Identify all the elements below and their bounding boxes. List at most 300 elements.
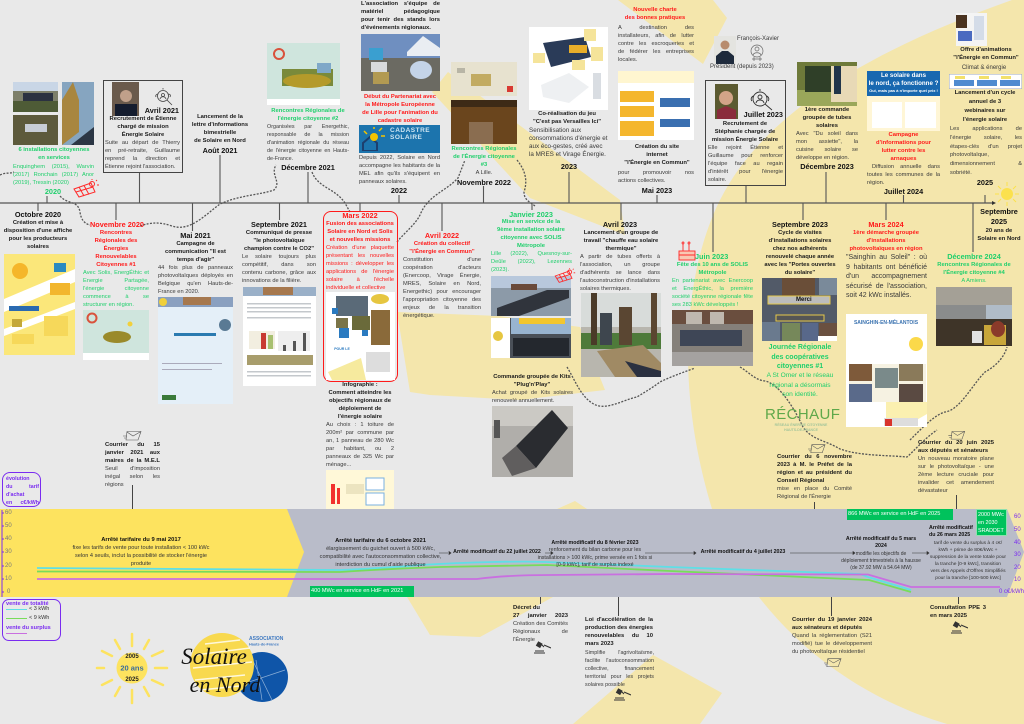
panel: courrier 6 novembre 2023 xyxy=(777,443,852,509)
heading xyxy=(672,261,753,277)
heading: Commande groupée de Kits xyxy=(493,374,571,380)
body xyxy=(974,227,1024,243)
arrêté mars 2025: vers des Appels d'Offres Simplifiés xyxy=(930,569,1006,574)
icon: gavel xyxy=(533,641,551,655)
heading xyxy=(325,381,395,421)
heading: Conseil Régional xyxy=(777,478,824,484)
body: cuisine solaire se xyxy=(796,147,858,153)
logo RECHAUF xyxy=(765,400,837,431)
body: innovations de la filière. xyxy=(242,278,301,284)
body: 20 ans de xyxy=(986,228,1012,234)
title RECHAUF: Journée Régionale xyxy=(769,344,831,351)
legend cyan: < 3 kWh xyxy=(29,606,49,612)
logo: Solaire en Nord: ASSOCIATION xyxy=(249,636,284,642)
left axis labels: 40 xyxy=(5,536,12,542)
panel: Avril 2021 recruitment xyxy=(103,80,183,173)
date: Novembre 2022 xyxy=(457,178,511,187)
heading site xyxy=(624,144,690,166)
body: d'adhérents se lance dans xyxy=(580,270,660,276)
heading webinars: Lancement d'un cycle xyxy=(955,90,1015,96)
right axis labels: 10 xyxy=(1014,577,1021,583)
body: contenu carbone, grâce aux xyxy=(242,270,316,276)
date: Avril 2022 xyxy=(425,231,459,240)
heading site: internet xyxy=(646,152,668,158)
logo RECHAUF: RÉCHAUF xyxy=(765,406,840,423)
heading xyxy=(580,229,662,253)
legend: evolution du tarif: évolution xyxy=(6,476,30,482)
body: 44 fois plus de panneaux xyxy=(158,265,233,271)
badge 866 MWc xyxy=(847,509,953,520)
body: l'association, un groupe xyxy=(580,262,660,268)
heading: Recrutement de Étienne xyxy=(110,116,176,122)
heading xyxy=(403,240,481,256)
heading: travail "chauffe eau solaire xyxy=(584,238,658,244)
heading: communication "Il est xyxy=(165,249,226,255)
body xyxy=(777,485,852,501)
body: mon assiette", la xyxy=(796,139,858,145)
arrêté 2017: produite xyxy=(131,561,151,567)
heading association: L'association s'équipe de xyxy=(361,1,440,7)
heading: Cycle de visites xyxy=(778,230,822,236)
body: Diffusion annuelle dans xyxy=(872,164,940,170)
press image xyxy=(243,287,316,386)
poster xyxy=(846,314,927,427)
body: sur le photovoltaïque - une xyxy=(918,464,994,470)
arrêté février 2023: installations > 100 kWc, prime versée en 1 fois si xyxy=(538,555,652,561)
heading association: d'événements régionaux. xyxy=(361,25,431,31)
panel: 2022 Partenariat xyxy=(359,1,440,195)
body: Avec Solis, EnergÉthic et xyxy=(83,270,149,276)
arrêté 2017 xyxy=(60,536,222,568)
photo xyxy=(714,36,736,64)
panel: offre d'animations xyxy=(948,13,1024,187)
right axis labels: 40 xyxy=(1014,540,1021,546)
logo RECHAUF: RÉSEAU ÉNERGIE CITOYENNE xyxy=(775,423,827,427)
body: "Sainghin au Soleil" : où xyxy=(846,254,927,261)
left axis labels: 30 xyxy=(5,549,12,555)
heading: "C'est pas Versailles Ici" xyxy=(533,119,601,125)
body: responsable de la mission xyxy=(267,132,349,138)
body: région. xyxy=(867,180,884,186)
heading: mars 2023 xyxy=(585,641,614,647)
heading: Lancement de la xyxy=(197,114,243,120)
photo xyxy=(715,84,738,119)
heading: production des énergies xyxy=(585,625,653,631)
date: Mai 2023 xyxy=(642,186,672,195)
body: Quand la réglementation (S21 xyxy=(792,633,872,639)
heading: Recrutement de xyxy=(723,121,767,127)
body: la MRES et Virage Énergie. xyxy=(529,151,606,158)
body: d'un accompagnement xyxy=(846,273,927,280)
logo RECHAUF: HAUTS-DE-FRANCE xyxy=(784,428,818,432)
caption: 6 installations citoyennes xyxy=(18,147,90,153)
body: commence à se xyxy=(83,294,149,300)
body: France en 2020. xyxy=(158,289,199,295)
body: développe en région. xyxy=(796,155,849,161)
title: #3 xyxy=(481,162,487,168)
heading: avec les "Portes ouvertes xyxy=(764,262,836,268)
heading: Rencontres xyxy=(100,230,132,236)
date: Décembre 2023 xyxy=(800,162,854,171)
right axis labels: 0 c€/kWh xyxy=(999,589,1024,595)
heading site: "l'Énergie en Commun" xyxy=(624,160,690,166)
logo: Solaire en Nord: Hauts-de-France xyxy=(249,642,279,646)
heading: Décret du xyxy=(513,605,540,611)
panel: Janvier 2023 xyxy=(490,210,574,359)
left axis labels: 60 xyxy=(5,510,12,516)
body: individuelle et collective xyxy=(326,285,385,291)
photo xyxy=(581,293,661,377)
left axis labels: 50 xyxy=(5,523,12,529)
heading webinars: l'énergie solaire xyxy=(963,117,1007,123)
body: l'appropriation citoyenne des xyxy=(403,297,481,303)
heading: 1ère commande xyxy=(805,107,849,113)
legend label surplus: vente du surplus xyxy=(6,625,51,631)
poster xyxy=(158,297,233,404)
red title: des bonnes pratiques xyxy=(625,15,685,21)
panel: campagne arnaques xyxy=(866,71,941,196)
heading: Énergies xyxy=(104,246,128,252)
body xyxy=(585,649,654,689)
group photo xyxy=(672,310,753,366)
body xyxy=(158,264,233,296)
body: (Enercoop, Virage Énergie, xyxy=(403,273,481,279)
name: François-Xavier xyxy=(737,36,779,42)
right axis labels: 50 xyxy=(1014,527,1021,533)
body: d'intérêt pour l'énergie xyxy=(708,169,783,175)
heading: en mars 2025 xyxy=(930,613,967,619)
timeline axis with ticks xyxy=(0,155,996,252)
body: structurer en région. xyxy=(83,302,134,308)
heading: renouvelé chaque année xyxy=(766,254,834,260)
body xyxy=(513,620,568,644)
panel: consultation PPE 3 xyxy=(930,597,987,635)
body: Un nouveau moratoire plane xyxy=(918,456,994,462)
heading: Communiqué de presse xyxy=(246,230,312,236)
body xyxy=(105,465,160,489)
body: Le solaire toujours plus xyxy=(242,254,316,260)
flyer: Oui, mais pas à n'importe quel prix ! xyxy=(869,88,938,93)
heading xyxy=(192,114,248,144)
body: dévastateur xyxy=(918,488,948,494)
body xyxy=(491,250,572,274)
body xyxy=(83,269,149,309)
arrêté mars 2025 xyxy=(926,525,1010,583)
body: énergétique. xyxy=(403,313,435,319)
panel: Septembre 2025 xyxy=(974,207,1024,244)
list of sites: (2017) Ronchain (2017) Anor xyxy=(13,172,94,178)
body: régions xyxy=(105,482,124,488)
right axis labels: 60 xyxy=(1014,514,1021,520)
logo: sun 20 ans: 2005 xyxy=(125,654,139,660)
heading xyxy=(242,229,316,253)
heading: Campagne de xyxy=(176,241,215,247)
heading: Stéphanie chargée de xyxy=(715,129,775,135)
date: Avril 2023 xyxy=(603,220,637,229)
heading: et nouvelles missions xyxy=(330,237,390,243)
body: enjeux de la transition xyxy=(403,305,481,311)
date: Septembre 2023 xyxy=(772,220,828,229)
arrêté mars 2025: la tranche [0-9 kWc], transition xyxy=(935,562,1001,567)
arrêté 2021: Arrêté tarifaire du 6 octobre 2021 xyxy=(335,538,426,544)
red title xyxy=(625,7,685,21)
red title: Début du Partenariat avec xyxy=(364,94,436,100)
poster xyxy=(4,254,75,355)
flyer: le nord, ça fonctionne ? xyxy=(869,80,938,86)
body: missions : développer les xyxy=(326,261,394,267)
body: MEL afin qu'ils s'équipent en xyxy=(359,171,440,177)
badge 2000 MWc: 2000 MWc xyxy=(978,512,1004,518)
title: de l'Énergie citoyenne xyxy=(453,154,515,160)
arrêté 2021: compatibilité avec l'autoconsommation collective, xyxy=(320,554,441,560)
legend green: < 9 kWh xyxy=(29,615,49,621)
date: Avril 2021 xyxy=(145,106,179,115)
body xyxy=(950,125,1022,178)
body: 200m² par commune par xyxy=(326,430,394,436)
panel: Juin 2023 xyxy=(672,240,755,367)
body: toutes les communes de la xyxy=(867,172,940,178)
heading: Fête des 10 ans de SOLIS xyxy=(677,262,748,268)
date: Juin 2023 xyxy=(695,252,728,261)
heading xyxy=(948,46,1024,62)
panel: tubes solaires xyxy=(796,62,858,172)
panel: Août 2021 xyxy=(192,114,248,155)
heading: Mise en service de la xyxy=(502,219,560,225)
body: l'énergie solaire, les xyxy=(950,135,1022,141)
arrêté 2017: selon 4 seuils, inclut la possibilité de stocker l'énergie xyxy=(75,553,207,559)
heading webinars: webinaires sur xyxy=(965,108,1005,114)
body: Achat groupé de Kits solaires xyxy=(492,390,573,396)
body: Elle rejoint Étienne et xyxy=(708,145,783,151)
icon: gavel xyxy=(613,688,631,702)
body xyxy=(267,124,349,162)
arrêté mars 2025: tarif de vente du surplus à 4 c€/ xyxy=(934,541,1002,546)
photo Etienne xyxy=(112,82,139,116)
heading: Métropole xyxy=(517,243,545,249)
body: panneaux de 325 Wc par xyxy=(326,454,394,460)
heading xyxy=(712,121,778,143)
heading: Co-réalisation du jeu xyxy=(538,111,596,117)
role: Président (depuis 2023) xyxy=(710,64,774,70)
body: dimensionnement & xyxy=(950,161,1022,167)
body: Lille (2022), Quesnoy-sur- xyxy=(491,251,572,257)
connector xyxy=(958,597,959,604)
logo: sun 20 ans: 2025 xyxy=(125,677,139,683)
heading association xyxy=(361,1,440,31)
body: l'Énergie xyxy=(513,637,535,643)
heading xyxy=(491,373,573,389)
connector xyxy=(540,597,541,604)
heading: Courrier du 6 novembre xyxy=(777,454,852,460)
heading: lettre d'informations xyxy=(192,122,248,128)
arrêté 2017: fixe les tarifs de vente pour toute installation < 100 kWc xyxy=(73,545,209,551)
badge 400 MWc xyxy=(310,586,414,597)
panel: 2023 jeu xyxy=(529,27,608,171)
body xyxy=(326,244,394,292)
date: Novembre 2020 xyxy=(90,220,144,229)
chart: tariff band xyxy=(0,509,1024,598)
heading: chez nos adhérents xyxy=(773,246,827,252)
heading: Loi d'accélération de la xyxy=(585,617,653,623)
date: Septembre xyxy=(980,207,1018,216)
body: territorial pour les projets xyxy=(585,674,654,680)
heading xyxy=(110,115,176,138)
arrêté mars 2025: Arrêté modificatif xyxy=(929,525,973,531)
heading: Comment atteindre les xyxy=(328,390,392,396)
arrêté 4 juillet 2023: Arrêté modificatif du 4 juillet 2023 xyxy=(701,549,785,555)
icon: recruit magnifier xyxy=(155,88,172,106)
brochure: POUR LE xyxy=(334,347,350,351)
heading: Citoyennes #1 xyxy=(96,262,136,268)
arrêté mars 2024: modifie les objectifs de xyxy=(856,551,906,557)
photo xyxy=(492,406,573,477)
title: Rencontres Régionales xyxy=(452,146,516,152)
body xyxy=(242,253,316,285)
date: Mai 2021 xyxy=(180,231,211,240)
title: Rencontres Régionales de xyxy=(271,108,345,114)
connector xyxy=(956,495,957,509)
heading: mission Énergie Solaire xyxy=(712,137,778,143)
panel: courrier 15 janvier 2021 xyxy=(105,430,161,490)
heading: thermique" xyxy=(605,246,637,252)
body xyxy=(762,371,838,400)
body: sécurisé de l'association, xyxy=(846,283,927,290)
body xyxy=(492,389,573,405)
date: Janvier 2023 xyxy=(509,210,553,219)
date: 2022 xyxy=(391,186,407,195)
legend: evolution du tarif: du tarif xyxy=(6,484,39,490)
date: Mars 2024 xyxy=(868,220,904,229)
heading: d'installations xyxy=(866,238,906,244)
body: l'équipe face au regain xyxy=(708,161,783,167)
body: contre les escroqueries et xyxy=(618,41,694,47)
heading webinars: annuel de 3 xyxy=(969,99,1001,105)
title xyxy=(271,108,345,122)
arrêté 2021: élargissement du guichet ouvert à 500 kWc, xyxy=(326,546,435,552)
body: Au choix : 1 toiture de xyxy=(326,422,394,428)
body: aux éco-gestes, créé avec xyxy=(529,143,603,150)
photos xyxy=(491,276,571,358)
panel: courrier 20 juin 2025 xyxy=(918,430,995,509)
heading association: pour tenir des stands lors xyxy=(361,17,440,23)
body: de-France. xyxy=(267,156,293,162)
heading: Lancement d'un groupe de xyxy=(584,230,658,236)
body: solaire à l'échelle xyxy=(326,277,394,283)
heading: Énergie Solaire xyxy=(122,132,164,138)
date: Juillet 2024 xyxy=(884,187,923,196)
legend: courbes tarifaires xyxy=(2,599,61,641)
heading xyxy=(918,439,994,455)
heading xyxy=(930,604,986,620)
body: du photovoltaïque résidentiel xyxy=(792,649,865,655)
icon: envelope xyxy=(948,430,966,440)
date: Septembre 2021 xyxy=(251,220,307,229)
left axis labels: 10 xyxy=(5,576,12,582)
place: A Amiens. xyxy=(961,278,987,284)
body xyxy=(867,163,940,187)
panel: Avril 2023 chauffe-eau xyxy=(580,220,662,378)
red title: d'informations pour xyxy=(876,140,931,146)
body: collective, financement xyxy=(585,666,654,672)
legend: evolution du tarif: en c€/kWh xyxy=(6,500,39,506)
date: Octobre 2020 xyxy=(15,210,61,219)
body xyxy=(672,277,753,309)
heading xyxy=(2,219,74,251)
heading: renouvelables du 10 xyxy=(585,633,653,639)
body: Simplifie l'agrivoltaïsme, xyxy=(585,650,654,656)
body: an, 1 panneau de 280 Wc xyxy=(326,438,394,444)
body: Guillaume pour renforcer xyxy=(708,153,783,159)
left axis labels: 20 xyxy=(5,563,12,569)
body: ses 283 kWc développés ! xyxy=(672,302,738,308)
body: société citoyenne régionale fête xyxy=(672,294,753,300)
connector xyxy=(814,502,815,509)
heading xyxy=(796,106,858,130)
subtitle: Climat & énergie xyxy=(962,65,1006,71)
heading: Consultation PPE 3 xyxy=(930,605,986,611)
logo: Solaire en Nord xyxy=(175,630,290,710)
body: renouvelé annuellement. xyxy=(492,398,554,404)
body: solaires thermiques. xyxy=(580,286,631,292)
body: installateurs, afin de lutter xyxy=(618,33,694,39)
body: A St Omer et le réseau xyxy=(767,372,833,379)
heading: région et au président du xyxy=(777,470,852,476)
body: applications de l'énergie xyxy=(326,269,394,275)
heading: Offre d'animations xyxy=(960,47,1012,53)
heading: 1ère démarche groupée xyxy=(853,230,919,236)
red title: Nouvelle charte xyxy=(633,7,677,13)
icon: envelope xyxy=(808,443,826,454)
flyer: Le solaire dans xyxy=(881,72,926,79)
heading: Fusion des associations xyxy=(326,221,394,227)
heading xyxy=(760,229,840,277)
heading xyxy=(105,441,160,465)
body: invalider cet amendement xyxy=(918,480,994,486)
heading: aux sénateurs et députés xyxy=(792,625,862,631)
panel: Mars 2024 xyxy=(845,220,929,428)
icon: sun 20 ans xyxy=(994,182,1020,207)
red title: de Lille pour l'animation du xyxy=(362,110,438,116)
panel: Septembre 2023 xyxy=(760,220,840,432)
body: Création d'une plaquette xyxy=(326,245,394,251)
red title: arnaques xyxy=(890,156,916,162)
body site: pour promouvoir nos xyxy=(618,170,694,176)
heading xyxy=(83,229,149,269)
heading webinars xyxy=(948,89,1022,125)
body xyxy=(796,130,858,162)
body: Deûle (2022), Lezennes xyxy=(491,259,572,265)
cadastre banner: SOLAIRE xyxy=(390,134,422,141)
body: en pré-retraite, Guillaume xyxy=(105,148,180,154)
map and room photos xyxy=(451,62,517,144)
heading: janvier 2021 aux xyxy=(105,450,160,456)
right axis labels xyxy=(998,509,1024,597)
title RECHAUF: des coopératives xyxy=(771,354,829,360)
heading: Infographie : xyxy=(342,382,378,388)
heading: "l'Énergie en Commun" xyxy=(409,249,475,255)
cadastre banner xyxy=(359,125,440,153)
icon: envelope xyxy=(123,430,142,441)
heading: aux députés et sénateurs xyxy=(918,448,988,454)
date: Décembre 2024 xyxy=(947,252,1001,261)
body: de l'énergie citoyenne en Hauts- xyxy=(267,148,349,154)
body xyxy=(359,155,440,185)
photo xyxy=(936,287,1012,346)
red title xyxy=(362,94,438,124)
legend label totalité: vente de totalité xyxy=(6,601,49,607)
body: A partir de tubes offerts à xyxy=(580,254,660,260)
body xyxy=(529,127,608,158)
